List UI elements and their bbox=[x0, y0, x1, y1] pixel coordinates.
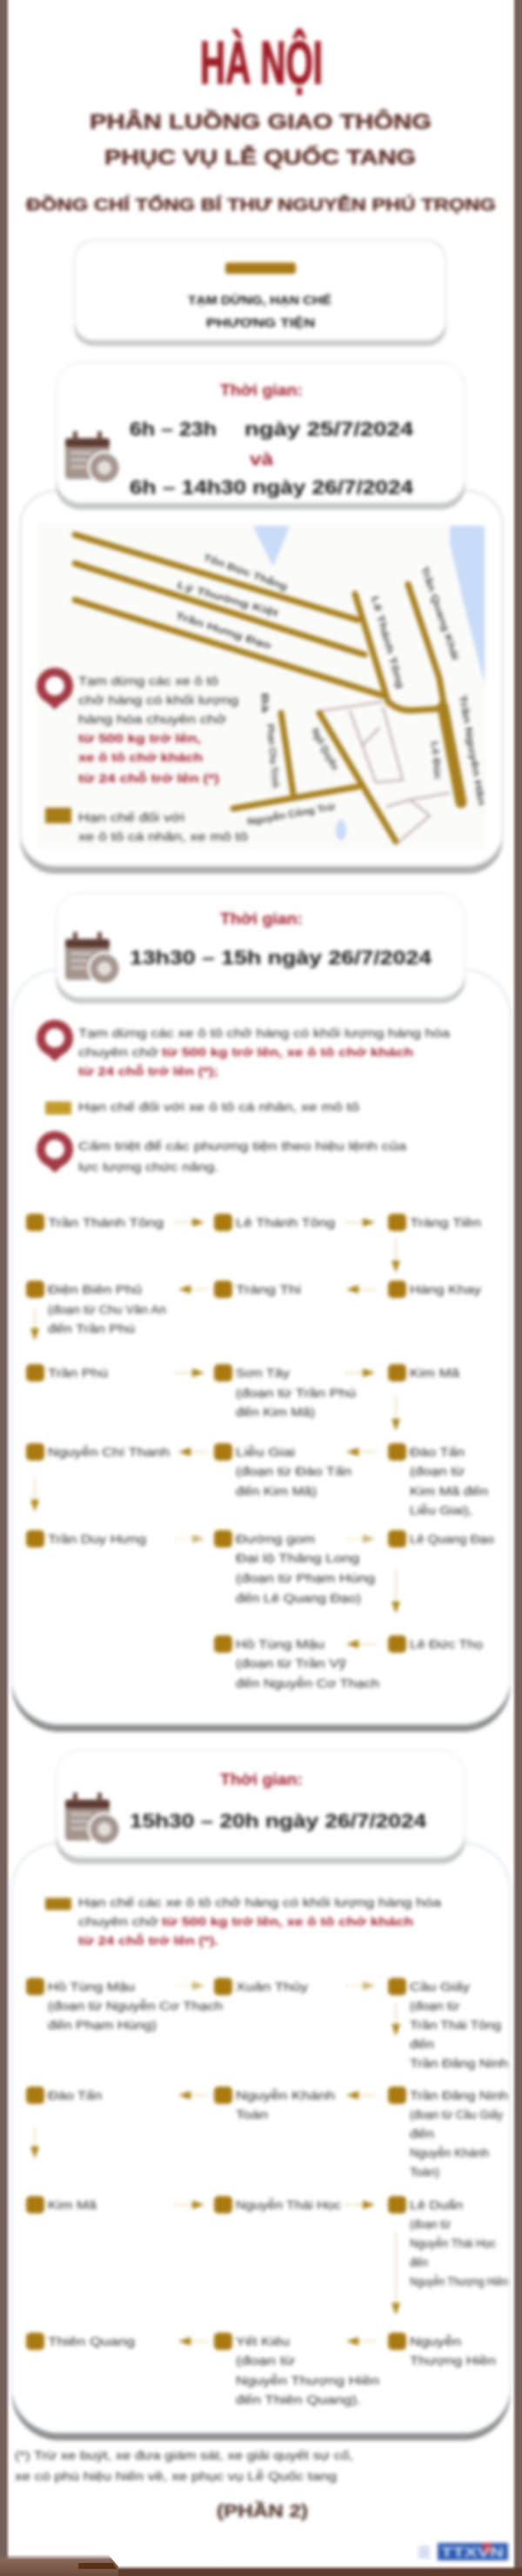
stop text: từ 24 chỗ trở lên (*) bbox=[78, 771, 219, 785]
limit text: từ 500 kg trở lên, xe ô tô chở khách bbox=[162, 1914, 413, 1928]
time box 2: Thời gian: bbox=[220, 910, 303, 928]
route flow: Nguyễn Thượng Hiền bbox=[236, 2373, 379, 2387]
route flow: Lê Quang Đạo bbox=[410, 1532, 494, 1546]
map: Bà bbox=[259, 693, 270, 714]
time box 1: Thời gian: bbox=[220, 382, 303, 399]
route flow: Đào Tấn bbox=[48, 2088, 102, 2102]
route flow: (đoạn từ Phạm Hùng bbox=[236, 1571, 375, 1585]
route flow: đến Lê Quang Đạo) bbox=[236, 1591, 361, 1605]
route flow: Kim Mã bbox=[410, 1366, 459, 1380]
stop text: chuyên chở bbox=[78, 1045, 158, 1059]
panel: third period bbox=[11, 1843, 511, 2440]
time box 1: và bbox=[250, 450, 274, 469]
route flow: Kim Mã bbox=[48, 2198, 97, 2212]
panel: second period bbox=[11, 969, 511, 1732]
route flow: Hồ Tùng Mậu bbox=[236, 1637, 325, 1651]
part label: (PHẦN 2) bbox=[217, 2501, 308, 2521]
route flow: Trần Duy Hưng bbox=[48, 1532, 146, 1546]
route flow: Trần Đăng Ninh bbox=[410, 2088, 508, 2102]
icon: limit swatch bbox=[45, 808, 71, 823]
route flow: (đoạn từ bbox=[410, 1464, 465, 1478]
map: Phan Chu Trinh bbox=[264, 723, 280, 789]
limit text bbox=[78, 1895, 441, 1947]
route flow: Tràng Thi bbox=[236, 1282, 301, 1296]
stop text: từ 500 kg trở lên, bbox=[78, 731, 201, 745]
route flow: Lê Duẩn bbox=[410, 2198, 463, 2212]
route flow: Lê Đức Thọ bbox=[410, 1637, 483, 1651]
route flow: Toàn bbox=[236, 2107, 268, 2121]
limit text: Hạn chế đối với bbox=[78, 810, 184, 824]
stop text: chở hàng có khối lượng bbox=[78, 693, 238, 707]
route flow: đến Kim Mã) bbox=[236, 1405, 315, 1419]
stop text: từ 500 kg trở lên, xe ô tô chở khách bbox=[162, 1045, 413, 1059]
icon: calendar bbox=[65, 932, 120, 984]
time box 2 bbox=[56, 893, 465, 1003]
icon: stop pin bbox=[41, 672, 69, 709]
time box 3: 15h30 – 20h ngày 26/7/2024 bbox=[130, 1810, 427, 1832]
subtitle: PHÂN LUỒNG GIAO THÔNG bbox=[90, 110, 432, 134]
route flow: Yết Kiêu bbox=[236, 2334, 290, 2348]
route flow: đến bbox=[410, 2127, 434, 2140]
icon: stop pin bbox=[41, 1024, 69, 1062]
route flow: đến Kim Mã) bbox=[236, 1484, 317, 1498]
route flow: Tràng Tiền bbox=[410, 1215, 481, 1229]
route flow: Đại lộ Thăng Long bbox=[236, 1551, 359, 1565]
ban text bbox=[78, 1139, 406, 1174]
route flow: Điện Biên Phủ bbox=[48, 1282, 142, 1296]
route flow: Trần Phú bbox=[48, 1366, 108, 1380]
map: Lê Thánh Tông bbox=[369, 596, 405, 690]
map: Ngô Quyền bbox=[309, 727, 340, 772]
route flow: đến bbox=[410, 2255, 428, 2269]
route flow: đến Phạm Hùng) bbox=[48, 2018, 157, 2032]
icon: calendar bbox=[65, 1793, 120, 1845]
map: Trần Hưng Đạo bbox=[174, 610, 273, 652]
route flow: Đào Tấn bbox=[410, 1445, 465, 1459]
route flow: đến bbox=[410, 2037, 434, 2051]
icon: limit swatch bbox=[45, 1898, 71, 1910]
route flow: (đoạn từ bbox=[410, 1999, 459, 2013]
logo bbox=[418, 2543, 508, 2560]
time box 1: 6h – 14h30 ngày 26/7/2024 bbox=[130, 476, 414, 498]
map: Trần Quang Khải bbox=[418, 565, 460, 662]
route flow: Hàng Khay bbox=[410, 1282, 481, 1296]
route flow: Liễu Giai), bbox=[410, 1503, 472, 1517]
map: Trần Nguyên Hãn bbox=[457, 694, 486, 807]
route flow: Nguyễn Chí Thanh bbox=[48, 1445, 170, 1459]
route flow: Liễu Giai bbox=[236, 1445, 295, 1459]
route flow: đến Trần Phú bbox=[48, 1321, 135, 1335]
stop text: Tạm dừng các xe ô tô chở hàng có khối lượng hàng hóa bbox=[78, 1026, 450, 1040]
limit text: Hạn chế đối với xe ô tô cá nhân, xe mô tô bbox=[78, 1100, 359, 1114]
ban text: lực lượng chức năng. bbox=[78, 1160, 218, 1174]
map: Lý Thường Kiệt bbox=[176, 580, 279, 619]
footnote: (*) Trừ xe buýt, xe đưa giám sát, xe giải quyết sự cố, bbox=[15, 2448, 353, 2462]
route flow: Toàn) bbox=[410, 2165, 439, 2179]
route flow: Nguyễn Thái Học bbox=[410, 2236, 496, 2250]
route flow: Nguyễn Khánh bbox=[236, 2088, 335, 2102]
route flow: Lê Thánh Tông bbox=[236, 1215, 335, 1229]
stop text bbox=[78, 674, 238, 785]
route flow: (đoạn từ Đào Tấn bbox=[236, 1464, 351, 1478]
stop text: hàng hóa chuyên chở bbox=[78, 712, 226, 726]
map bbox=[37, 524, 486, 849]
time box 1 bbox=[56, 363, 465, 509]
icon: limit swatch bbox=[45, 1102, 71, 1115]
icon: ban pin bbox=[41, 1135, 69, 1173]
route flow: Cầu Giấy bbox=[410, 1980, 470, 1994]
route flow: đến Nguyễn Cơ Thạch bbox=[236, 1676, 379, 1690]
subtitle: PHỤC VỤ LỄ QUỐC TANG bbox=[104, 144, 416, 170]
limit text bbox=[78, 810, 248, 843]
route flow: Hồ Tùng Mậu bbox=[48, 1980, 135, 1994]
route flow: Sơn Tây bbox=[236, 1366, 290, 1380]
subtitle: ĐỒNG CHÍ TỔNG BÍ THƯ NGUYỄN PHÚ TRỌNG bbox=[26, 196, 496, 215]
route flow: Kim Mã đến bbox=[410, 1484, 488, 1498]
route flow: (đoạn từ bbox=[236, 2353, 295, 2367]
icon: calendar bbox=[65, 431, 120, 483]
route flow: Trần Thái Tông bbox=[410, 2018, 501, 2032]
footnote: xe có phù hiệu hiến về, xe phục vụ Lễ Quốc tang bbox=[15, 2469, 337, 2483]
route flow: Thiên Quang bbox=[48, 2334, 135, 2348]
route flow: Nguyễn Khánh bbox=[410, 2146, 489, 2160]
map: Tôn Đức Thắng bbox=[202, 552, 289, 593]
legend box: TẠM DỪNG, HẠN CHẾ bbox=[188, 292, 331, 307]
limit text: chuyên chở bbox=[78, 1914, 158, 1928]
time box 3: Thời gian: bbox=[220, 1771, 303, 1788]
limit text: từ 24 chỗ trở lên (*). bbox=[78, 1934, 218, 1947]
route flow: (đoạn từ Chu Văn An bbox=[48, 1302, 166, 1316]
panel: first period map bbox=[20, 491, 503, 874]
route flow: Đường gom bbox=[236, 1532, 315, 1546]
route flow bbox=[26, 1978, 508, 2406]
time box 3 bbox=[56, 1750, 465, 1864]
limit text: xe ô tô cá nhân, xe mô tô bbox=[78, 829, 248, 843]
limit text: Hạn chế các xe ô tô chở hàng có khối lượng hàng hóa bbox=[78, 1895, 441, 1909]
stop text bbox=[78, 1026, 450, 1078]
time box 1: 6h – 23h bbox=[130, 418, 217, 440]
route flow: đến Thiên Quang). bbox=[236, 2393, 361, 2406]
route flow: Nguyễn Thái Học bbox=[236, 2198, 341, 2212]
footnote bbox=[15, 2448, 353, 2483]
route flow: Trần Đăng Ninh bbox=[410, 2056, 508, 2070]
map: Lò Đúc bbox=[429, 741, 443, 780]
stop text: từ 24 chỗ trở lên (*); bbox=[78, 1064, 218, 1078]
legend box bbox=[74, 240, 446, 346]
title: HÀ NỘI bbox=[200, 28, 323, 97]
subtitle bbox=[26, 110, 496, 215]
map: Nguyễn Công Trứ bbox=[246, 801, 336, 828]
time box 2: 13h30 – 15h ngày 26/7/2024 bbox=[130, 947, 432, 968]
route flow: (đoạn từ Trần Phú bbox=[236, 1386, 356, 1400]
logo: TTXVN bbox=[441, 2546, 504, 2560]
ban text: Cấm triệt để các phương tiện theo hiệu lệnh của bbox=[78, 1139, 406, 1153]
route flow: (đoạn từ Nguyễn Cơ Thạch bbox=[48, 1999, 223, 2013]
stop text: xe ô tô chở khách bbox=[78, 750, 203, 764]
route flow: (đoạn từ Trần Vỹ bbox=[236, 1656, 346, 1670]
route flow bbox=[26, 1214, 494, 1690]
time box 1: ngày 25/7/2024 bbox=[244, 418, 414, 440]
route flow: (đoạn từ Cầu Giấy bbox=[410, 2107, 503, 2121]
route flow: Xuân Thủy bbox=[236, 1980, 308, 1994]
route flow: (đoạn từ bbox=[410, 2217, 451, 2231]
route flow: Nguyễn bbox=[410, 2334, 461, 2348]
legend box: PHƯƠNG TIỆN bbox=[206, 315, 315, 329]
route flow: Thượng Hiền bbox=[410, 2353, 496, 2367]
route flow: Trần Thánh Tông bbox=[48, 1215, 164, 1229]
stop text: Tạm dừng các xe ô tô bbox=[78, 674, 218, 688]
